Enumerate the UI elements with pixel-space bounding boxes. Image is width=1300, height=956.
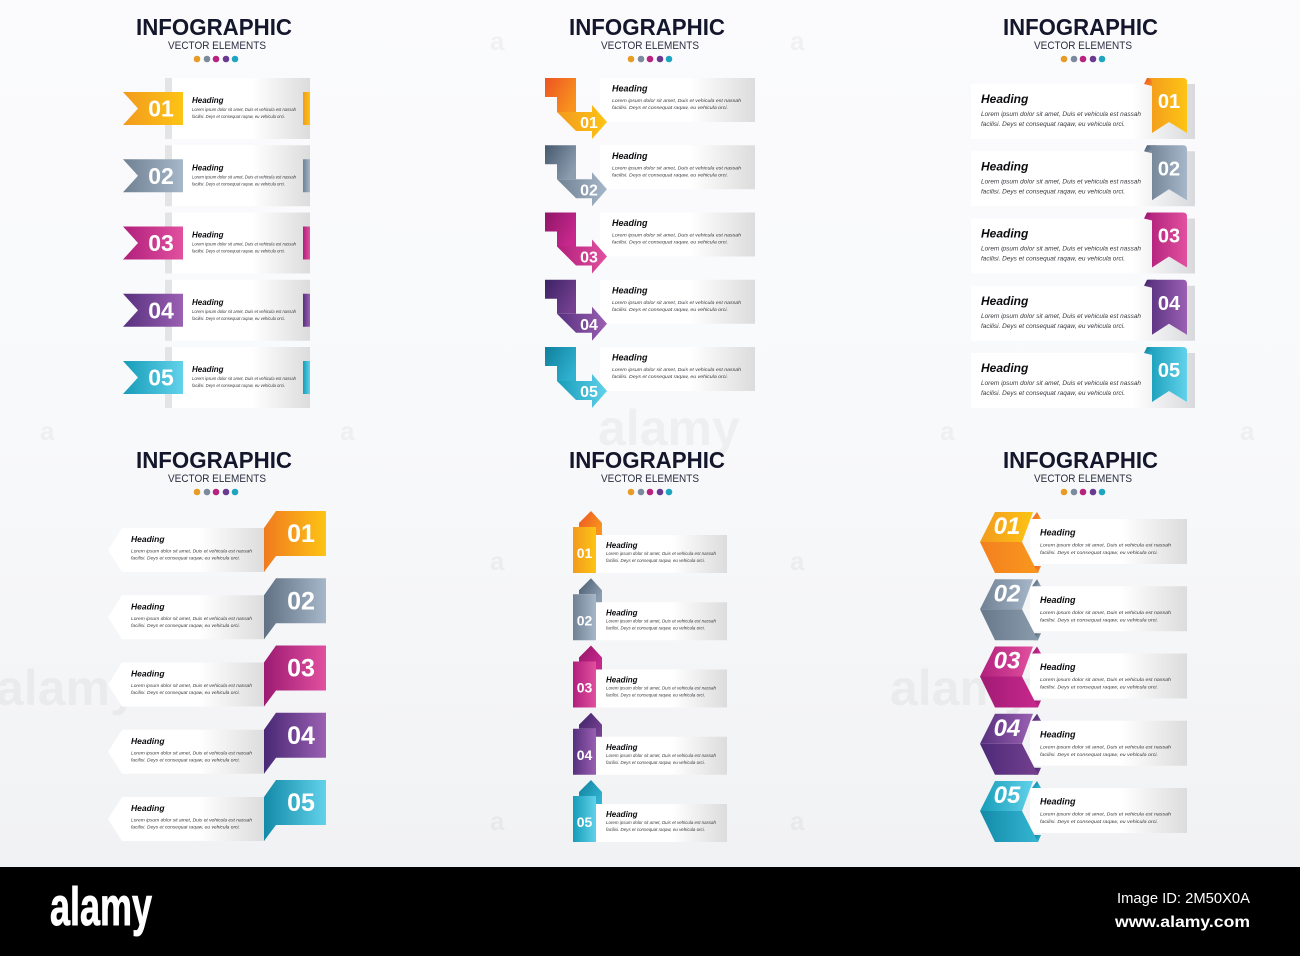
row 03: Heading xyxy=(612,218,648,228)
watermarks: a xyxy=(340,416,355,446)
row 02: Heading xyxy=(606,608,638,617)
row 02 xyxy=(123,145,310,206)
row 01: Heading xyxy=(1040,528,1076,538)
watermarks: a xyxy=(40,416,55,446)
row 05: 05 xyxy=(580,384,598,401)
row 02: Lorem ipsum dolor sit amet, Duis et vehicula est nassah xyxy=(612,165,741,171)
panel 3 title: VECTOR ELEMENTS xyxy=(1034,40,1132,52)
row 05 xyxy=(123,347,310,408)
row 05 xyxy=(980,781,1187,842)
panel 4 title: INFOGRAPHIC xyxy=(136,447,292,473)
panel 1: ribbon list xyxy=(123,14,310,408)
row 05: Heading xyxy=(981,361,1029,375)
row 04: Heading xyxy=(606,743,638,752)
row 03: Heading xyxy=(1040,662,1076,672)
row 03: Lorem ipsum dolor sit amet, Duis et vehicula est nassah xyxy=(606,686,717,690)
row 04 xyxy=(123,280,310,341)
row 04: 04 xyxy=(577,747,592,763)
row 02: facilisi. Deys et consequat raqaw, eu vehicula orci. xyxy=(606,625,705,630)
row 01: 01 xyxy=(148,96,174,122)
row 05: facilisi. Deys et consequat raqaw, eu vehicula orci. xyxy=(981,390,1125,397)
watermarks: a xyxy=(490,806,505,836)
row 04: Lorem ipsum dolor sit amet, Duis et vehicula est nassah xyxy=(612,300,741,306)
row 03 xyxy=(108,646,326,706)
row 05 xyxy=(545,347,755,408)
row 04 xyxy=(545,280,755,341)
row 02: Lorem ipsum dolor sit amet, Duis et vehicula est nassah xyxy=(131,616,252,622)
row 01: Lorem ipsum dolor sit amet, Duis et vehicula est nassah xyxy=(192,107,296,112)
panel 1 title: VECTOR ELEMENTS xyxy=(168,40,266,52)
row 03: 03 xyxy=(577,680,592,696)
row 02 xyxy=(971,145,1195,206)
panel 4 title: VECTOR ELEMENTS xyxy=(168,473,266,485)
panel 2: bent arrows xyxy=(545,14,755,408)
panel 1 title xyxy=(136,14,292,62)
row 01: facilisi. Deys et consequat raqaw, eu vehicula orci. xyxy=(981,121,1125,128)
panel 4: folded tags xyxy=(108,447,326,841)
row 05: 05 xyxy=(287,789,315,817)
row 02: Heading xyxy=(1040,595,1076,605)
row 01: Lorem ipsum dolor sit amet, Duis et vehicula est nassah xyxy=(606,551,717,556)
row 01: 01 xyxy=(580,115,598,132)
watermarks: a xyxy=(940,416,955,446)
row 03: facilisi. Deys et consequat raqaw, eu vehicula orci. xyxy=(606,692,705,698)
row 02 xyxy=(980,579,1187,640)
row 01: Lorem ipsum dolor sit amet, Duis et vehicula est nassah xyxy=(612,98,741,104)
row 03: Lorem ipsum dolor sit amet, Duis et vehicula est nassah xyxy=(192,242,296,246)
row 04: Lorem ipsum dolor sit amet, Duis et vehicula est nassah xyxy=(131,750,252,756)
row 05: Lorem ipsum dolor sit amet, Duis et vehicula est nassah xyxy=(1040,812,1171,818)
row 03: facilisi. Deys et consequat raqaw, eu vehicula orci. xyxy=(1040,684,1158,690)
row 04: Heading xyxy=(131,736,165,746)
row 04: facilisi. Deys et consequat raqaw, eu vehicula orci. xyxy=(192,316,285,321)
row 01: Lorem ipsum dolor sit amet, Duis et vehicula est nassah xyxy=(981,111,1141,118)
panel 6: chevrons xyxy=(980,447,1187,842)
row 05: Lorem ipsum dolor sit amet, Duis et vehicula est nassah xyxy=(192,376,296,381)
row 03: Heading xyxy=(606,676,638,684)
row 01: Heading xyxy=(606,541,638,550)
row 02: 02 xyxy=(994,580,1021,607)
row 03 xyxy=(123,212,310,274)
row 02: 02 xyxy=(577,612,592,628)
watermarks: a xyxy=(490,26,505,56)
row 01: facilisi. Deys et consequat raqaw, eu vehicula orci. xyxy=(192,114,285,119)
row 01: Heading xyxy=(192,96,224,105)
row 03: facilisi. Deys et consequat raqaw, eu vehicula orci. xyxy=(131,690,240,696)
row 03: 03 xyxy=(287,654,315,682)
row 02: facilisi. Deys et consequat raqaw, eu vehicula orci. xyxy=(612,172,728,178)
row 04: Lorem ipsum dolor sit amet, Duis et vehicula est nassah xyxy=(1040,744,1171,750)
row 05: Heading xyxy=(612,352,648,362)
row 05: Heading xyxy=(1040,796,1076,806)
panel 3 title: INFOGRAPHIC xyxy=(1003,14,1158,40)
row 04: facilisi. Deys et consequat raqaw, eu vehicula orci. xyxy=(981,323,1125,330)
row 02: 02 xyxy=(287,587,315,615)
row 02: Heading xyxy=(192,163,224,172)
row 01 xyxy=(573,511,727,573)
row 01: 01 xyxy=(994,513,1020,540)
row 04: Heading xyxy=(192,298,224,307)
panel 3 title xyxy=(1003,14,1158,62)
panel 2 title xyxy=(569,14,725,62)
row 01: 01 xyxy=(287,520,315,548)
row 02: Heading xyxy=(981,159,1029,173)
row 01: facilisi. Deys et consequat raqaw, eu vehicula orci. xyxy=(1040,550,1158,556)
row 01 xyxy=(108,511,326,572)
row 01: facilisi. Deys et consequat raqaw, eu vehicula orci. xyxy=(612,105,728,111)
row 03: Heading xyxy=(192,230,224,240)
alamy logo: alamy xyxy=(50,877,152,937)
row 03 xyxy=(971,212,1195,274)
row 02: Heading xyxy=(612,151,648,161)
panel 3: bookmarks xyxy=(971,14,1195,408)
row 02 xyxy=(573,578,727,640)
watermarks: a xyxy=(1240,416,1255,446)
row 01 xyxy=(980,512,1187,573)
row 05: Lorem ipsum dolor sit amet, Duis et vehicula est nassah xyxy=(131,818,252,824)
row 04 xyxy=(108,713,326,774)
panel 4 title xyxy=(136,447,292,495)
row 05: facilisi. Deys et consequat raqaw, eu vehicula orci. xyxy=(1040,819,1158,825)
row 03: 03 xyxy=(580,250,598,266)
website: www.alamy.com xyxy=(1114,914,1250,931)
image id: Image ID: 2M50X0A xyxy=(1117,890,1250,907)
row 05: Heading xyxy=(131,803,165,813)
panel 5 title xyxy=(569,447,725,495)
watermarks: a xyxy=(790,546,805,576)
row 01: Lorem ipsum dolor sit amet, Duis et vehicula est nassah xyxy=(131,548,252,554)
row 02: facilisi. Deys et consequat raqaw, eu vehicula orci. xyxy=(192,181,285,186)
row 03: Lorem ipsum dolor sit amet, Duis et vehicula est nassah xyxy=(131,683,252,689)
row 04: facilisi. Deys et consequat raqaw, eu vehicula orci. xyxy=(606,760,705,765)
row 05: Lorem ipsum dolor sit amet, Duis et vehicula est nassah xyxy=(981,380,1141,387)
row 05: facilisi. Deys et consequat raqaw, eu vehicula orci. xyxy=(612,374,728,380)
row 03: Heading xyxy=(981,226,1029,240)
row 04: Lorem ipsum dolor sit amet, Duis et vehicula est nassah xyxy=(981,313,1141,320)
row 04: Heading xyxy=(1040,729,1076,739)
watermarks: a xyxy=(790,806,805,836)
row 03: Heading xyxy=(131,668,165,678)
row 05: Lorem ipsum dolor sit amet, Duis et vehicula est nassah xyxy=(612,367,741,373)
panel 6 title: INFOGRAPHIC xyxy=(1003,447,1158,473)
watermarks: a xyxy=(790,26,805,56)
watermarks: alamy xyxy=(0,660,138,716)
row 05 xyxy=(971,347,1195,408)
watermarks: a xyxy=(490,546,505,576)
row 05: 05 xyxy=(994,782,1021,809)
watermarks: alamy xyxy=(890,660,1032,716)
panel 6 title: VECTOR ELEMENTS xyxy=(1034,473,1132,485)
row 04 xyxy=(980,714,1187,775)
row 04: facilisi. Deys et consequat raqaw, eu vehicula orci. xyxy=(612,307,728,313)
row 04: 04 xyxy=(287,722,315,750)
panel 5 title: VECTOR ELEMENTS xyxy=(601,473,699,485)
row 02: 02 xyxy=(580,182,598,199)
row 01: 01 xyxy=(1158,91,1180,113)
row 02: facilisi. Deys et consequat raqaw, eu vehicula orci. xyxy=(981,188,1125,195)
row 02 xyxy=(108,578,326,639)
panel 5: up arrows xyxy=(569,447,727,842)
row 01: Heading xyxy=(612,84,648,94)
row 02: Lorem ipsum dolor sit amet, Duis et vehicula est nassah xyxy=(606,618,717,623)
row 04 xyxy=(573,713,727,775)
row 04: Lorem ipsum dolor sit amet, Duis et vehicula est nassah xyxy=(606,753,717,758)
row 05: facilisi. Deys et consequat raqaw, eu vehicula orci. xyxy=(192,383,285,388)
row 03: Lorem ipsum dolor sit amet, Duis et vehicula est nassah xyxy=(612,232,741,238)
row 01: Heading xyxy=(981,92,1029,106)
panel 6 title xyxy=(1003,447,1158,495)
row 04: facilisi. Deys et consequat raqaw, eu vehicula orci. xyxy=(1040,752,1158,758)
row 05: facilisi. Deys et consequat raqaw, eu vehicula orci. xyxy=(606,827,705,832)
row 03 xyxy=(980,646,1187,708)
row 05 xyxy=(573,780,727,842)
row 05: Heading xyxy=(192,365,224,374)
row 01: Lorem ipsum dolor sit amet, Duis et vehicula est nassah xyxy=(1040,542,1171,548)
row 01 xyxy=(545,78,755,139)
row 03: Lorem ipsum dolor sit amet, Duis et vehicula est nassah xyxy=(1040,677,1171,683)
row 04: Heading xyxy=(612,285,648,295)
row 04: facilisi. Deys et consequat raqaw, eu vehicula orci. xyxy=(131,757,240,763)
row 02: facilisi. Deys et consequat raqaw, eu vehicula orci. xyxy=(1040,617,1158,623)
row 03: 03 xyxy=(148,230,174,256)
panel 2 title: INFOGRAPHIC xyxy=(569,14,725,40)
row 05: 05 xyxy=(1158,360,1180,382)
row 01: Heading xyxy=(131,534,165,544)
row 03: Lorem ipsum dolor sit amet, Duis et vehicula est nassah xyxy=(981,246,1141,252)
row 01 xyxy=(123,78,310,139)
row 02: Heading xyxy=(131,601,165,611)
row 03 xyxy=(573,646,727,708)
panel 5 title: INFOGRAPHIC xyxy=(569,447,725,473)
row 04: Heading xyxy=(981,294,1029,308)
row 04: 04 xyxy=(580,317,598,334)
row 04: 04 xyxy=(994,715,1020,742)
row 04: Lorem ipsum dolor sit amet, Duis et vehicula est nassah xyxy=(192,309,296,314)
panel 2 title: VECTOR ELEMENTS xyxy=(601,40,699,52)
row 02: 02 xyxy=(1158,158,1180,180)
row 02: Lorem ipsum dolor sit amet, Duis et vehicula est nassah xyxy=(981,178,1141,185)
row 02 xyxy=(545,145,755,206)
footer bar xyxy=(0,867,1300,956)
row 05 xyxy=(108,780,326,841)
row 03: 03 xyxy=(1158,226,1180,248)
row 04: 04 xyxy=(148,297,174,323)
row 03: facilisi. Deys et consequat raqaw, eu vehicula orci. xyxy=(981,256,1125,262)
row 05: 05 xyxy=(148,364,174,390)
row 04: 04 xyxy=(1158,293,1181,315)
row 05: 05 xyxy=(577,814,592,830)
row 01: facilisi. Deys et consequat raqaw, eu vehicula orci. xyxy=(131,556,240,562)
row 05: facilisi. Deys et consequat raqaw, eu vehicula orci. xyxy=(131,824,240,830)
row 04 xyxy=(971,280,1195,341)
row 02: facilisi. Deys et consequat raqaw, eu vehicula orci. xyxy=(131,623,240,629)
row 01 xyxy=(971,78,1195,139)
row 03: facilisi. Deys et consequat raqaw, eu vehicula orci. xyxy=(192,248,285,254)
watermarks: alamy xyxy=(598,400,740,456)
row 01: 01 xyxy=(577,545,592,561)
row 03: 03 xyxy=(994,648,1021,674)
row 02: Lorem ipsum dolor sit amet, Duis et vehicula est nassah xyxy=(1040,610,1171,616)
row 01: facilisi. Deys et consequat raqaw, eu vehicula orci. xyxy=(606,558,705,563)
row 05: Lorem ipsum dolor sit amet, Duis et vehicula est nassah xyxy=(606,820,717,825)
row 03: facilisi. Deys et consequat raqaw, eu vehicula orci. xyxy=(612,240,728,246)
row 02: Lorem ipsum dolor sit amet, Duis et vehicula est nassah xyxy=(192,174,296,179)
row 05: Heading xyxy=(606,810,638,819)
row 03 xyxy=(545,212,755,274)
panel 1 title: INFOGRAPHIC xyxy=(136,14,292,40)
row 02: 02 xyxy=(148,163,174,189)
